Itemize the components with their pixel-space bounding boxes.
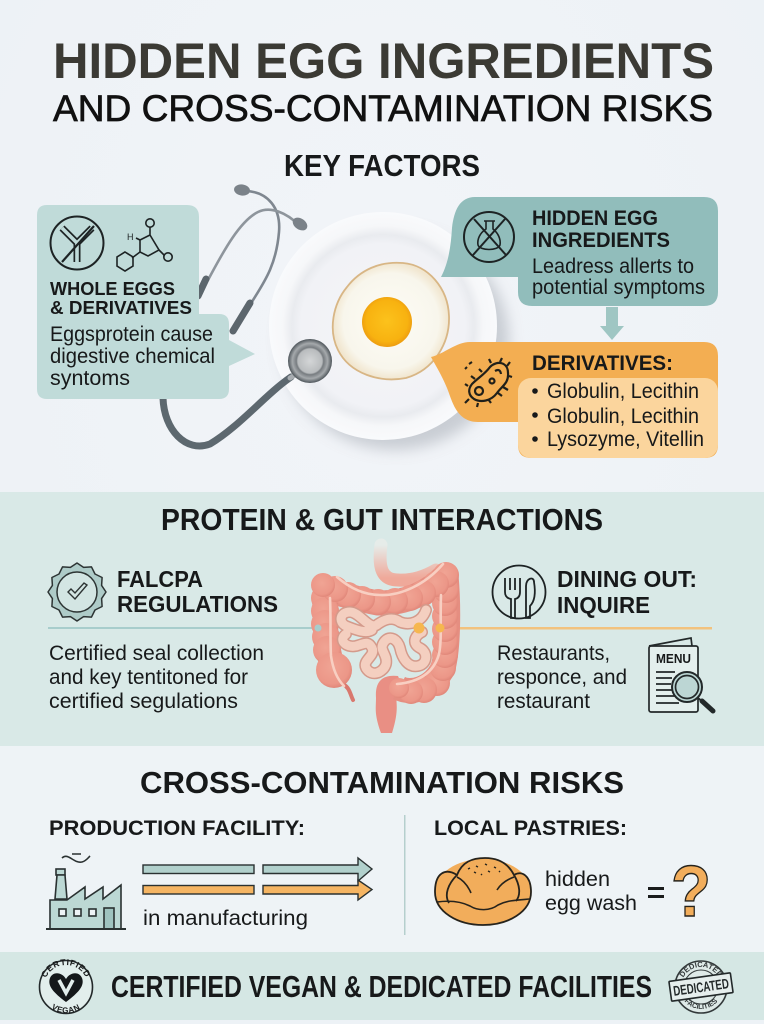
panel: protein and gut interactions [0,492,764,746]
text: falcpa heading: FALCPA [117,566,203,592]
text: dining out heading: INQUIRE [557,592,650,618]
text: hidden egg wash: hidden [545,868,610,891]
icon: menu with magnifier [649,638,713,712]
text: whole eggs body: digestive chemical [50,345,215,368]
text: falcpa body: and key tentitoned for [49,666,248,689]
illustration: intestines [311,545,459,733]
seal: certified vegan [38,959,94,1014]
text: whole eggs body: syntoms [50,367,130,390]
text: falcpa body: certified segulations [49,690,238,713]
icon: chemical structure: H [127,232,134,242]
text: dining out body: Restaurants, [497,642,610,665]
icon: factory [46,854,126,929]
arrow: hidden ingredients to derivatives [600,307,624,340]
text: whole eggs body: Eggsprotein cause [50,323,213,346]
text: derivatives list: Globulin, Lecithin [547,405,699,428]
text: dining out body: responce, and [497,666,627,689]
icon: fork and knife [492,566,546,618]
fried egg [333,263,449,379]
question mark: ? [671,852,711,932]
text: hidden egg body: potential symptoms [532,276,705,299]
title [53,33,714,129]
text: hidden egg wash [545,868,637,915]
colon underlay [325,575,448,691]
text: hidden egg heading: INGREDIENTS [532,229,670,252]
text: hidden egg wash: egg wash [545,892,637,915]
title: HIDDEN EGG INGREDIENTS [53,33,714,89]
icon: certification seal [48,563,106,621]
icon: no antibody [50,216,104,270]
heading: key factors: KEY FACTORS [284,148,480,183]
text: hidden egg body [532,255,705,299]
text: dining out body: restaurant [497,690,590,713]
panel: whole eggs and derivatives [37,205,255,399]
text: derivatives list: Lysozyme, Vitellin [547,428,704,451]
stamp: dedicated facilities: FACILITIES [684,998,717,1009]
panel: derivatives [431,342,718,458]
stamp: dedicated facilities: DEDICATED [672,975,730,999]
vertical divider [404,815,406,935]
text: falcpa heading [117,566,278,617]
text: whole eggs heading: & DERIVATIVES [50,298,192,318]
text: falcpa body [49,642,264,713]
text: dining out body [497,642,627,713]
text: derivatives list [532,380,704,451]
seal: certified vegan: VEGAN [53,1004,80,1013]
appendix [343,684,353,700]
connection dots [314,622,444,634]
stethoscope [163,183,332,446]
equals sign [648,887,664,898]
icon: production line arrows [143,858,372,900]
text: dining out heading [557,566,697,618]
text: local pastries: LOCAL PASTRIES: [434,817,627,840]
text: hidden egg body: Leadress allerts to [532,255,694,278]
heading: protein and gut: PROTEIN & GUT INTERACTIONS [161,502,603,537]
icon: menu with magnifier: MENU [656,651,691,666]
text: whole eggs body [50,323,215,390]
text: derivatives heading: DERIVATIVES: [532,352,673,375]
stamp: dedicated facilities [668,960,734,1014]
text: falcpa body: Certified seal collection [49,642,264,665]
text: derivatives list: Globulin, Lecithin [547,380,699,403]
footer band [0,952,764,1020]
seal: certified vegan: CERTIFIED [42,959,90,977]
small intestine [341,610,426,673]
text: falcpa heading: REGULATIONS [117,591,278,617]
icon: crossed flask [464,212,514,262]
icon: pastry bun [435,858,531,925]
panel: cross-contamination risks [0,746,764,952]
text: dining out heading: DINING OUT: [557,566,697,592]
text: whole eggs heading [50,279,192,318]
esophagus and stomach [380,545,436,580]
plate with fried egg [269,212,509,450]
large intestine [311,562,459,704]
rectum [376,676,404,733]
title: AND CROSS-CONTAMINATION RISKS [53,88,713,129]
text: hidden egg heading: HIDDEN EGG [532,207,658,230]
icon: chemical structure [117,219,172,271]
text: in manufacturing: in manufacturing [143,907,308,930]
icon: bacterium [465,358,512,407]
divider lines [48,627,712,630]
heading: cross-contamination: CROSS-CONTAMINATION RISKS [140,765,624,800]
text: hidden egg heading [532,207,670,252]
panel: hidden egg ingredients [441,197,718,306]
text: production facility: PRODUCTION FACILITY: [49,817,305,840]
text: whole eggs heading: WHOLE EGGS [50,279,175,299]
stamp: dedicated facilities: DEDICATED [679,962,722,978]
